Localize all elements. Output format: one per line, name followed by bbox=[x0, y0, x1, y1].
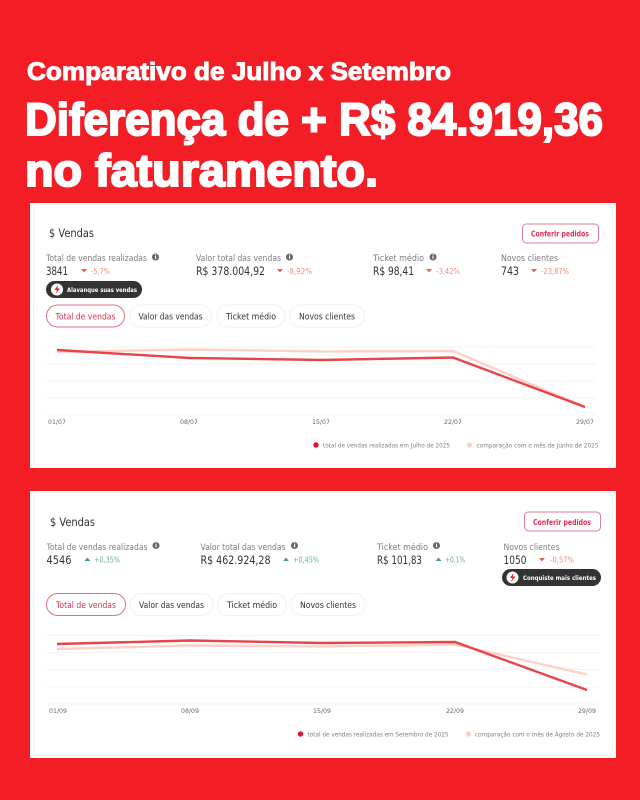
metric: ticket medio: R$ 98,41 bbox=[373, 264, 414, 278]
line chart: julho bbox=[46, 347, 596, 426]
metric: novos clientes: Novos clientes bbox=[504, 543, 560, 553]
legend: total de vendas realizadas em Julho de 2025 bbox=[323, 442, 450, 450]
metric: ticket medio: Ticket médio bbox=[372, 253, 424, 264]
metric: valor total: Valor total das vendas bbox=[196, 254, 281, 264]
line chart: julho: 15/07 bbox=[312, 418, 330, 426]
headline: revenue: no faturamento. bbox=[25, 145, 378, 196]
metric: total de vendas: -5,7% bbox=[91, 267, 110, 276]
metric: total de vendas: i bbox=[154, 254, 157, 261]
metric: total de vendas: i bbox=[155, 543, 157, 550]
metric: novos clientes: -23,87% bbox=[541, 267, 569, 276]
panel: julho bbox=[30, 203, 616, 468]
badge: alavanque suas vendas bbox=[46, 281, 142, 298]
metric: novos clientes: Novos clientes bbox=[501, 254, 558, 264]
tabs: Novos clientes bbox=[300, 601, 356, 611]
metric: ticket medio: R$ 101,83 bbox=[377, 553, 422, 567]
tabs: Novos clientes bbox=[299, 312, 355, 322]
panel heading: $ Vendas bbox=[50, 515, 95, 529]
badge: conquiste mais clientes bbox=[502, 569, 601, 586]
tabs: Total de vendas bbox=[55, 601, 116, 611]
metric: novos clientes bbox=[501, 254, 569, 278]
legend bbox=[298, 730, 600, 738]
legend: comparação com o mês de Junho de 2025 bbox=[476, 442, 598, 450]
title: Comparativo de Julho x Setembro bbox=[27, 58, 451, 86]
metric: valor total: +0,45% bbox=[293, 556, 319, 564]
line chart: setembro: 08/09 bbox=[181, 707, 199, 715]
line chart: julho: 01/07 bbox=[48, 418, 66, 426]
metric: novos clientes: 743 bbox=[501, 264, 519, 278]
tabs: Ticket médio bbox=[226, 600, 277, 611]
metric: valor total: R$ 462.924,28 bbox=[200, 553, 270, 567]
tabs bbox=[46, 594, 366, 616]
panel heading: $ Vendas bbox=[49, 226, 94, 240]
headline: difference: Diferença de + R$ 84.919,36 bbox=[25, 94, 603, 145]
metric: ticket medio: Ticket médio bbox=[376, 542, 428, 553]
line chart: julho: 08/07 bbox=[180, 418, 198, 426]
metric: total de vendas bbox=[45, 254, 159, 278]
metric: total de vendas: +0,35% bbox=[94, 556, 120, 564]
metric: valor total: i bbox=[293, 543, 296, 550]
metric: valor total bbox=[196, 254, 312, 278]
tabs bbox=[46, 305, 364, 327]
tabs: Ticket médio bbox=[225, 312, 276, 322]
line chart: julho: 22/07 bbox=[444, 418, 462, 426]
button: conferir pedidos bbox=[524, 512, 600, 531]
metric: valor total: i bbox=[288, 254, 291, 261]
metric: ticket medio: i bbox=[432, 254, 434, 261]
button: conferir pedidos: Conferir pedidos bbox=[531, 230, 589, 238]
metric: ticket medio bbox=[376, 542, 465, 567]
metric: valor total: -8,92% bbox=[287, 267, 312, 276]
metric: novos clientes: 1050 bbox=[504, 553, 526, 567]
metric: ticket medio: i bbox=[435, 543, 438, 550]
metric: total de vendas: 3841 bbox=[46, 264, 68, 278]
legend: comparação com o mês de Agosto de 2025 bbox=[475, 730, 600, 738]
button: conferir pedidos bbox=[522, 224, 598, 243]
line chart: setembro bbox=[46, 636, 598, 715]
metric: total de vendas: Total de vendas realizadas bbox=[45, 254, 147, 264]
tabs: Valor das vendas bbox=[138, 312, 203, 322]
line chart: julho: 29/07 bbox=[576, 418, 594, 426]
metric: total de vendas: Total de vendas realizadas bbox=[46, 543, 148, 553]
badge: conquiste mais clientes: Conquiste mais clientes bbox=[523, 574, 596, 582]
metric: total de vendas bbox=[46, 542, 160, 567]
metric: valor total: R$ 378.004,92 bbox=[196, 264, 265, 278]
line chart: setembro: 22/09 bbox=[446, 707, 464, 715]
metric: novos clientes bbox=[504, 543, 574, 567]
metric: valor total: Valor total das vendas bbox=[200, 543, 286, 553]
legend: total de vendas realizadas em Setembro de 2025 bbox=[308, 730, 448, 738]
line chart: setembro: 15/09 bbox=[313, 707, 331, 715]
metric: ticket medio: -3,42% bbox=[436, 267, 460, 276]
metric: ticket medio: +0,1% bbox=[445, 556, 465, 564]
panel: setembro bbox=[30, 491, 616, 758]
button: conferir pedidos: Conferir pedidos bbox=[533, 518, 591, 527]
metric: valor total bbox=[200, 542, 319, 567]
metric: total de vendas: 4546 bbox=[46, 553, 72, 567]
metric: novos clientes: -0,57% bbox=[550, 556, 574, 564]
line chart: setembro: 01/09 bbox=[49, 707, 67, 715]
tabs: Valor das vendas bbox=[139, 601, 204, 611]
metric: ticket medio bbox=[372, 253, 460, 278]
line chart: setembro: 29/09 bbox=[578, 707, 596, 715]
badge: alavanque suas vendas: Alavanque suas vendas bbox=[67, 286, 137, 294]
tabs: Total de vendas bbox=[55, 312, 116, 322]
legend bbox=[313, 442, 598, 450]
